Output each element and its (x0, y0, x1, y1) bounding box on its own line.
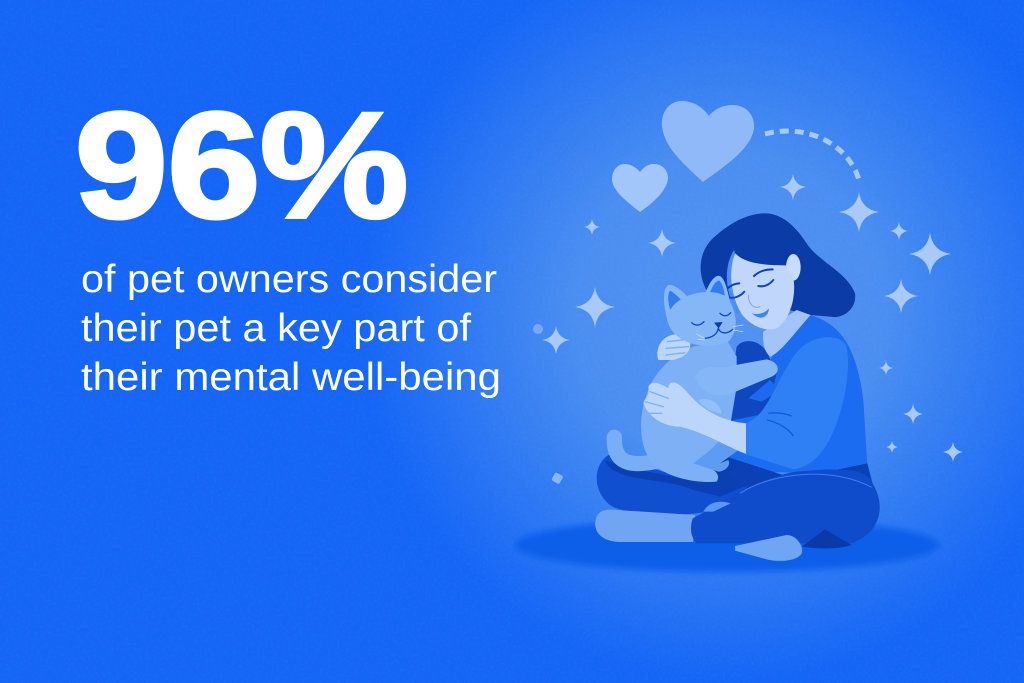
woman: finger lines (645, 392, 668, 413)
cat: belly patch (698, 399, 722, 413)
description text (81, 258, 501, 399)
woman: back hand (657, 334, 690, 360)
woman: back hand fingers (666, 339, 688, 355)
woman: sweater collar fold (748, 380, 780, 402)
illustration: woman hugging cat (595, 213, 880, 561)
big statistic: 96% (75, 82, 408, 249)
dashed arc (765, 131, 859, 180)
ground shadow (515, 518, 939, 572)
sparkles (533, 174, 963, 484)
woman: rear leg shade (605, 453, 760, 497)
cat: right inner ear (710, 281, 725, 298)
woman: face (731, 253, 794, 329)
cat: left inner ear (668, 291, 684, 317)
description text: their pet a key part of (81, 307, 471, 350)
woman: hair rim (727, 250, 747, 313)
cat: reaching paw (695, 359, 778, 395)
woman: neck (763, 310, 811, 357)
woman: ear (786, 254, 801, 281)
cat: tail (614, 437, 655, 464)
description text: their mental well-being (81, 356, 501, 399)
woman: waist band (720, 457, 873, 493)
woman: under knee shadow (802, 529, 852, 548)
cat: nose (714, 322, 723, 328)
cat: left ear (664, 285, 692, 327)
woman: rear leg (597, 455, 760, 515)
woman: front leg (691, 469, 880, 543)
woman: back hair (701, 213, 855, 317)
icon: large heart (662, 101, 754, 182)
woman: leg highlight (740, 474, 872, 493)
cat: whiskers (696, 325, 743, 340)
icon: small heart (612, 164, 668, 212)
woman: dark inner sweater (720, 341, 777, 463)
woman: hidden toe (703, 502, 731, 512)
woman: sleeve creases (767, 413, 793, 436)
woman: front arm and hand (643, 382, 746, 454)
woman: sweater torso (727, 315, 867, 473)
cat: face lines (692, 313, 733, 338)
cat: hind leg shade (693, 427, 743, 472)
cat: right ear (705, 276, 732, 308)
woman: sweater arm (745, 337, 848, 469)
cat: head (668, 292, 736, 346)
woman: eyes and mouth (726, 269, 773, 307)
woman: smile (752, 308, 769, 318)
description text: of pet owners consider (81, 258, 497, 301)
woman: near foot (595, 510, 695, 542)
cat: body (641, 340, 737, 482)
woman: far foot (735, 535, 802, 561)
